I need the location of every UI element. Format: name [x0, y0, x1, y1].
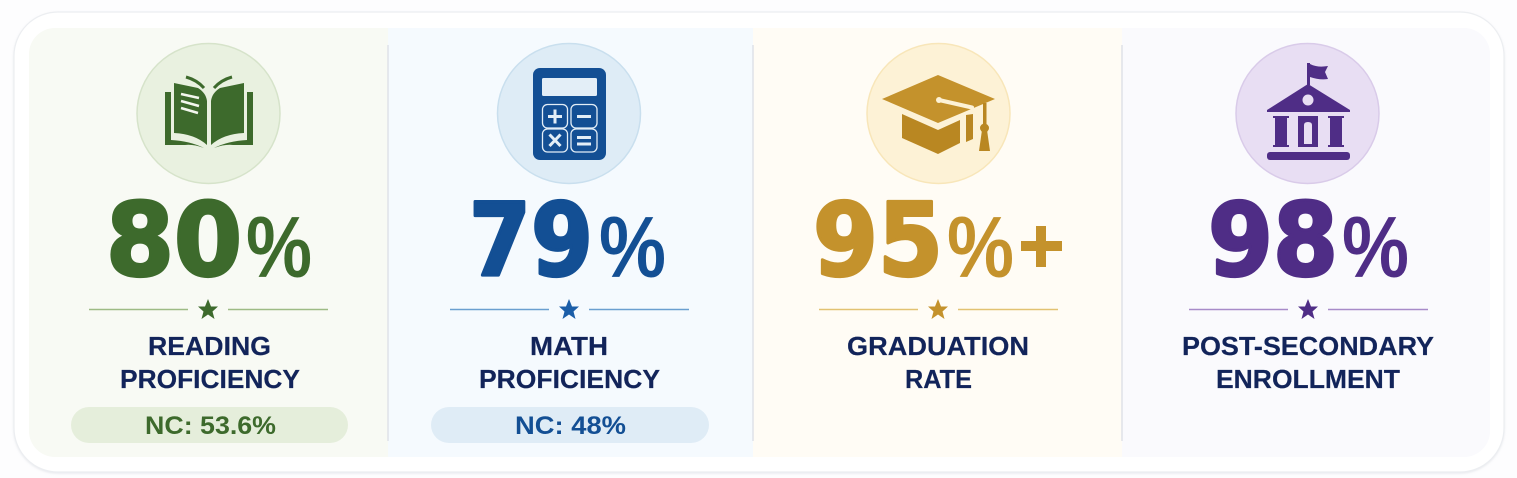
label: PROFICIENCY	[479, 364, 660, 394]
label: READING	[148, 331, 271, 361]
divider with star	[450, 299, 689, 319]
state comparison pill	[71, 407, 348, 443]
label: MATH	[530, 331, 608, 361]
big number: %	[1342, 200, 1409, 296]
big number: 95	[813, 181, 943, 299]
state comparison pill: NC: 53.6%	[145, 412, 276, 440]
label: ENROLLMENT	[1216, 364, 1400, 394]
big number: %	[246, 200, 312, 296]
label	[120, 331, 300, 394]
icon: graduation cap	[867, 44, 1010, 184]
big number: %	[599, 200, 666, 296]
divider with star	[89, 299, 328, 319]
icon: college building	[1236, 44, 1379, 184]
state comparison pill	[431, 407, 709, 443]
panel: math proficiency	[388, 28, 753, 457]
divider with star	[819, 299, 1058, 319]
big number	[106, 181, 312, 299]
big number	[813, 181, 1062, 299]
label: RATE	[905, 364, 972, 394]
label: PROFICIENCY	[120, 364, 300, 394]
big number: 80	[106, 181, 242, 299]
label: POST-SECONDARY	[1182, 331, 1434, 361]
state comparison pill: NC: 48%	[515, 412, 626, 440]
divider with star	[1189, 299, 1428, 319]
panel: graduation rate	[753, 28, 1122, 457]
icon: calculator	[498, 44, 640, 184]
big number: %	[947, 200, 1014, 296]
big number: 98	[1208, 181, 1338, 299]
label: GRADUATION	[847, 331, 1029, 361]
label	[847, 331, 1029, 394]
big number: 79	[469, 181, 593, 299]
panel: post-secondary enrollment	[1122, 28, 1490, 457]
big number	[1208, 181, 1409, 299]
label	[479, 331, 660, 394]
label	[1182, 331, 1434, 394]
icon: open book	[137, 44, 280, 184]
panel: reading proficiency	[29, 28, 388, 457]
